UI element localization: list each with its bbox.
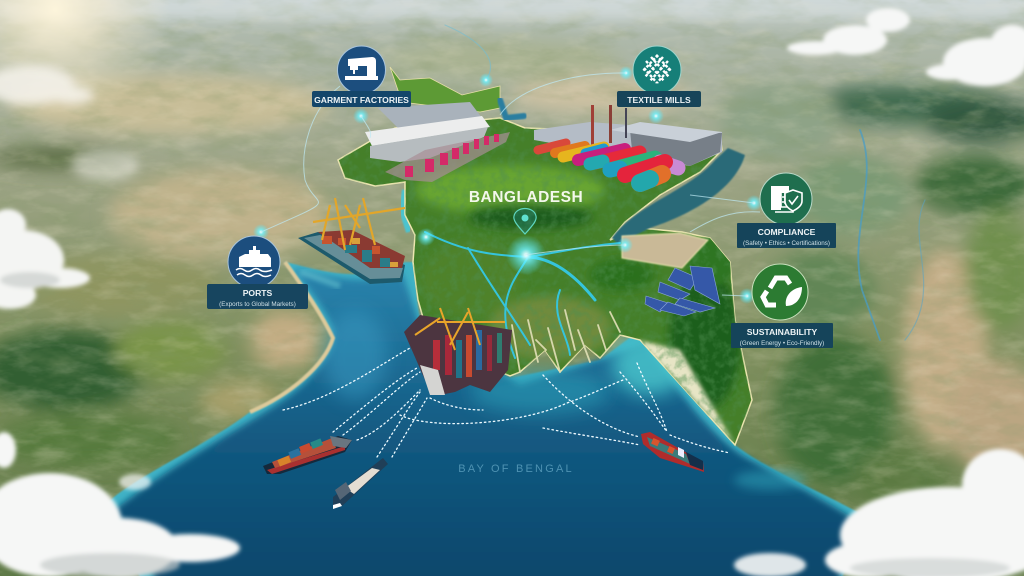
shipping routes: [283, 348, 730, 457]
cargo ship: center: [333, 458, 388, 509]
glow nodes: [253, 66, 762, 304]
port with cranes and ship in the northwest bay: [298, 198, 405, 284]
label: compliance: COMPLIANCE: [758, 227, 816, 237]
bay of bengal: [98, 190, 875, 576]
inland water: rivers and channels: [425, 100, 745, 372]
label: sustainability: SUSTAINABILITY: [747, 327, 818, 337]
clouds: bottom right: [734, 449, 1024, 576]
label: ports: (Exports to Global Markets): [219, 301, 296, 308]
icon: ship on waves: [228, 236, 280, 288]
label: textile mills: TEXTILE MILLS: [627, 95, 691, 105]
map label: Bay of Bengal: BAY OF BENGAL: [458, 463, 574, 475]
clouds: top left with sun haze: [0, 0, 170, 181]
label: compliance: (Safety • Ethics • Certifications): [743, 240, 830, 247]
label: ports: PORTS: [243, 288, 273, 298]
callout: garment factories: [312, 46, 411, 107]
cargo ship: left: [263, 436, 352, 474]
callout: ports: [207, 236, 308, 309]
icon: document with shield: [760, 173, 812, 225]
icon: woven fabric: [633, 46, 681, 94]
icon: recycling leaf: [752, 264, 808, 320]
label: sustainability: [731, 323, 833, 348]
map label: Bangladesh: [469, 189, 583, 234]
label: sustainability: (Green Energy • Eco-Friendly): [740, 340, 824, 347]
icon: location pin: [514, 208, 536, 234]
label: garment factories: GARMENT FACTORIES: [314, 95, 409, 105]
clouds: bottom left: [0, 432, 240, 576]
garment factory building: [365, 102, 510, 182]
clouds: left edge: [0, 209, 90, 309]
icon: sewing machine: [338, 46, 386, 94]
cargo ship: right: [641, 432, 704, 472]
map label: Bangladesh: BANGLADESH: [469, 189, 583, 206]
callout: compliance: [737, 173, 836, 248]
clouds: top right: [787, 8, 1024, 86]
label: ports: [207, 284, 308, 309]
label: compliance: [737, 223, 836, 248]
connector lines: [261, 73, 760, 296]
textile mill and fabric rolls: [534, 105, 722, 183]
solar panels: [645, 266, 720, 316]
port with cranes and containers in the delta: [404, 308, 512, 395]
callout: sustainability: [731, 264, 833, 348]
map: bangladesh landmass: [330, 60, 760, 460]
callout: textile mills: [617, 46, 701, 107]
